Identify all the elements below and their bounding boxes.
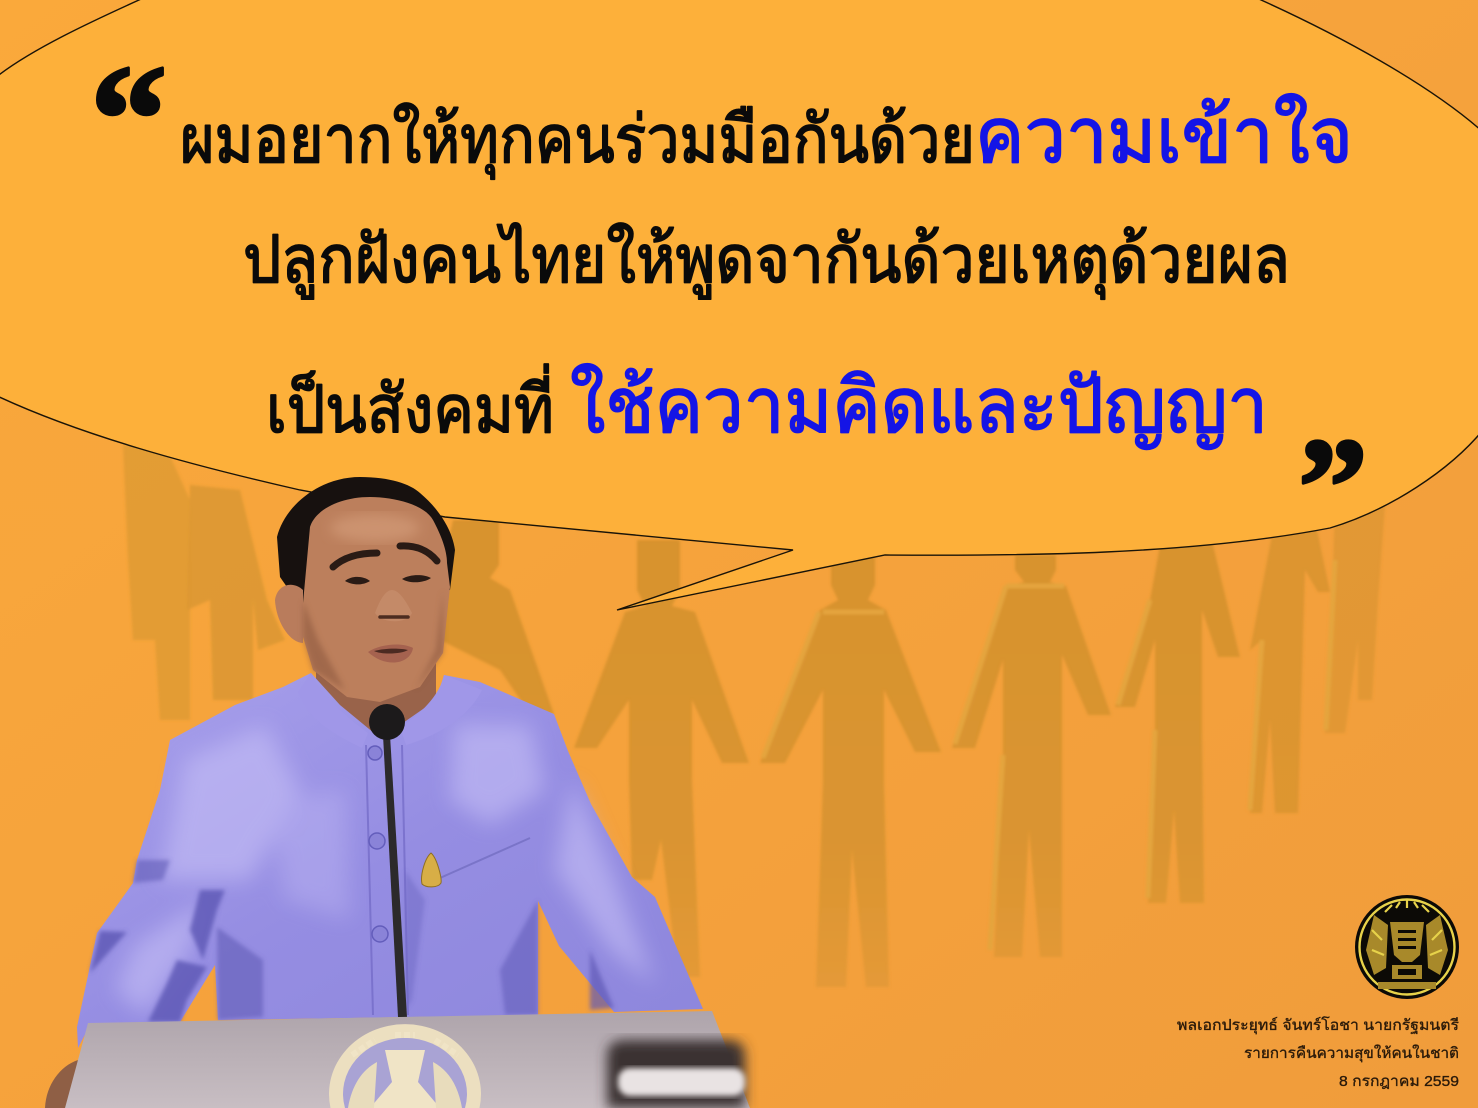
far-left figure — [123, 445, 190, 720]
figure 4 — [1115, 545, 1240, 903]
name and position: พลเอกประยุทธ์ จันทร์โอชา นายกรัฐมนตรี — [1177, 1016, 1459, 1035]
placket — [366, 745, 408, 1015]
suit jacket — [77, 673, 703, 1048]
microphone — [369, 704, 407, 1017]
buttons — [368, 746, 388, 942]
collar — [298, 673, 482, 748]
figure 6 — [1325, 505, 1385, 733]
line 3 highlight: ใช้ความคิดและปัญญา — [570, 363, 1268, 449]
hair — [277, 477, 455, 610]
figure 1 — [574, 540, 749, 977]
podium seal — [329, 1024, 481, 1108]
figure 5 — [1250, 530, 1330, 813]
facial features — [333, 546, 437, 663]
blurred camera foreground — [607, 1040, 745, 1108]
nose — [375, 590, 412, 621]
neck — [316, 650, 436, 740]
figure 2 — [760, 540, 941, 987]
date: 8 กรกฎาคม 2559 — [1339, 1073, 1459, 1090]
speaker at podium — [45, 477, 750, 1108]
line 1 highlight: ความเข้าใจ — [975, 93, 1353, 179]
suit shadows — [90, 860, 614, 1022]
breast pocket line — [440, 838, 530, 878]
gold lapel pin — [422, 853, 441, 887]
brows — [333, 546, 437, 567]
speech bubble — [0, 0, 1478, 610]
second-left figure — [187, 485, 285, 700]
opening quotation mark: “ — [90, 33, 168, 205]
eyes — [345, 575, 431, 584]
forehead light — [330, 514, 420, 542]
quote text — [180, 93, 1353, 449]
figure behind speaker — [440, 520, 554, 714]
hand — [45, 1060, 78, 1108]
line 3: เป็นสังคมที่ — [266, 364, 554, 446]
attribution text — [1177, 1016, 1459, 1090]
face — [303, 497, 450, 702]
closing quotation mark: ” — [1298, 410, 1368, 565]
suit highlights — [115, 725, 655, 1015]
figure 3 — [952, 555, 1111, 957]
ear — [275, 585, 303, 643]
programme: รายการคืนความสุขให้คนในชาติ — [1244, 1044, 1459, 1063]
cheek shading — [303, 590, 443, 690]
podium — [65, 1011, 750, 1108]
background paper-chain people — [123, 445, 1385, 987]
figure edge highlights — [763, 560, 1335, 950]
government seal — [1355, 895, 1459, 999]
line 2: ปลูกฝังคนไทยให้พูดจากันด้วยเหตุด้วยผล — [243, 222, 1290, 300]
line 1: ผมอยากให้ทุกคนร่วมมือกันด้วย — [180, 102, 975, 180]
mouth — [368, 645, 413, 663]
